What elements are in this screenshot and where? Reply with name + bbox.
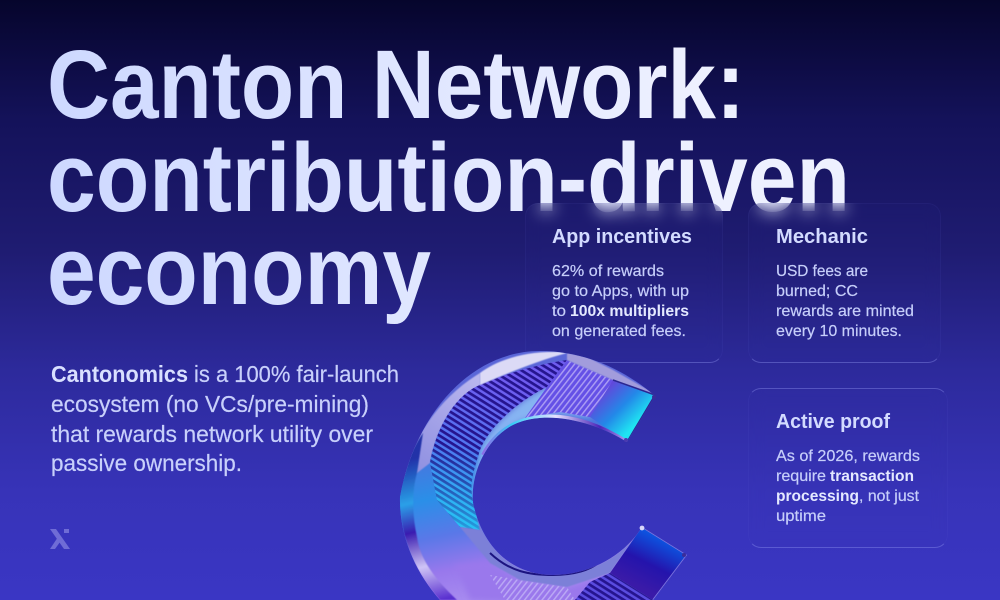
lower light stripes — [490, 575, 575, 600]
panel: mechanic: burned; CC — [776, 283, 858, 300]
panel: app incentives: 62% of rewards — [552, 263, 664, 280]
panel: mechanic: every 10 minutes. — [776, 323, 902, 340]
glass body — [395, 345, 695, 600]
panel: active proof: As of 2026, rewards — [776, 448, 920, 465]
panel: mechanic: Mechanic — [776, 226, 868, 248]
intro paragraph: that rewards network utility over — [51, 421, 373, 447]
title: economy — [47, 216, 431, 325]
panel: active proof: processing — [776, 488, 859, 505]
intro paragraph: is a 100% fair-launch — [194, 361, 399, 387]
inner rim highlight — [483, 417, 627, 455]
panel: active proof: uptime — [776, 508, 826, 525]
panel: app incentives: go to Apps, with up — [552, 283, 689, 300]
panel: active proof: , not just — [859, 488, 920, 505]
dark striped band — [430, 360, 567, 530]
intro paragraph: passive ownership. — [51, 450, 242, 476]
lower terminal cap — [610, 527, 687, 600]
inner lower glass — [460, 516, 632, 588]
panel: app incentives: App incentives — [552, 226, 692, 248]
lower dark stripes — [575, 573, 653, 600]
illustration: glass letter C — [400, 351, 687, 600]
silver strip on upper left — [403, 373, 480, 480]
panel: active proof: require — [776, 468, 826, 485]
panel: mechanic: rewards are minted — [776, 303, 914, 320]
soft colour fields — [466, 387, 604, 600]
panel: active proof: transaction — [830, 468, 914, 485]
panel: app incentives: 100x multipliers — [570, 303, 689, 320]
panel: app incentives: on generated fees. — [552, 323, 686, 340]
panel: mechanic: USD fees are — [776, 263, 868, 280]
top silver highlight — [480, 352, 567, 385]
light striped band — [525, 360, 613, 418]
panel: app incentives — [525, 203, 723, 363]
title: contribution-driven — [47, 123, 850, 232]
outer left lip — [400, 433, 457, 600]
upper terminal cap — [590, 380, 655, 442]
intro paragraph: ecosystem (no VCs/pre-mining) — [51, 391, 369, 417]
panel: mechanic — [748, 203, 941, 363]
panel: active proof — [748, 388, 948, 548]
intro paragraph: Cantonomics — [51, 361, 188, 387]
title: Canton Network: — [47, 30, 745, 139]
icon: brand logo — [50, 529, 70, 549]
panel: active proof: Active proof — [776, 411, 890, 433]
terminal tip highlights — [624, 395, 686, 557]
panel: app incentives: to — [552, 303, 566, 320]
top right translucent glass — [567, 353, 657, 395]
